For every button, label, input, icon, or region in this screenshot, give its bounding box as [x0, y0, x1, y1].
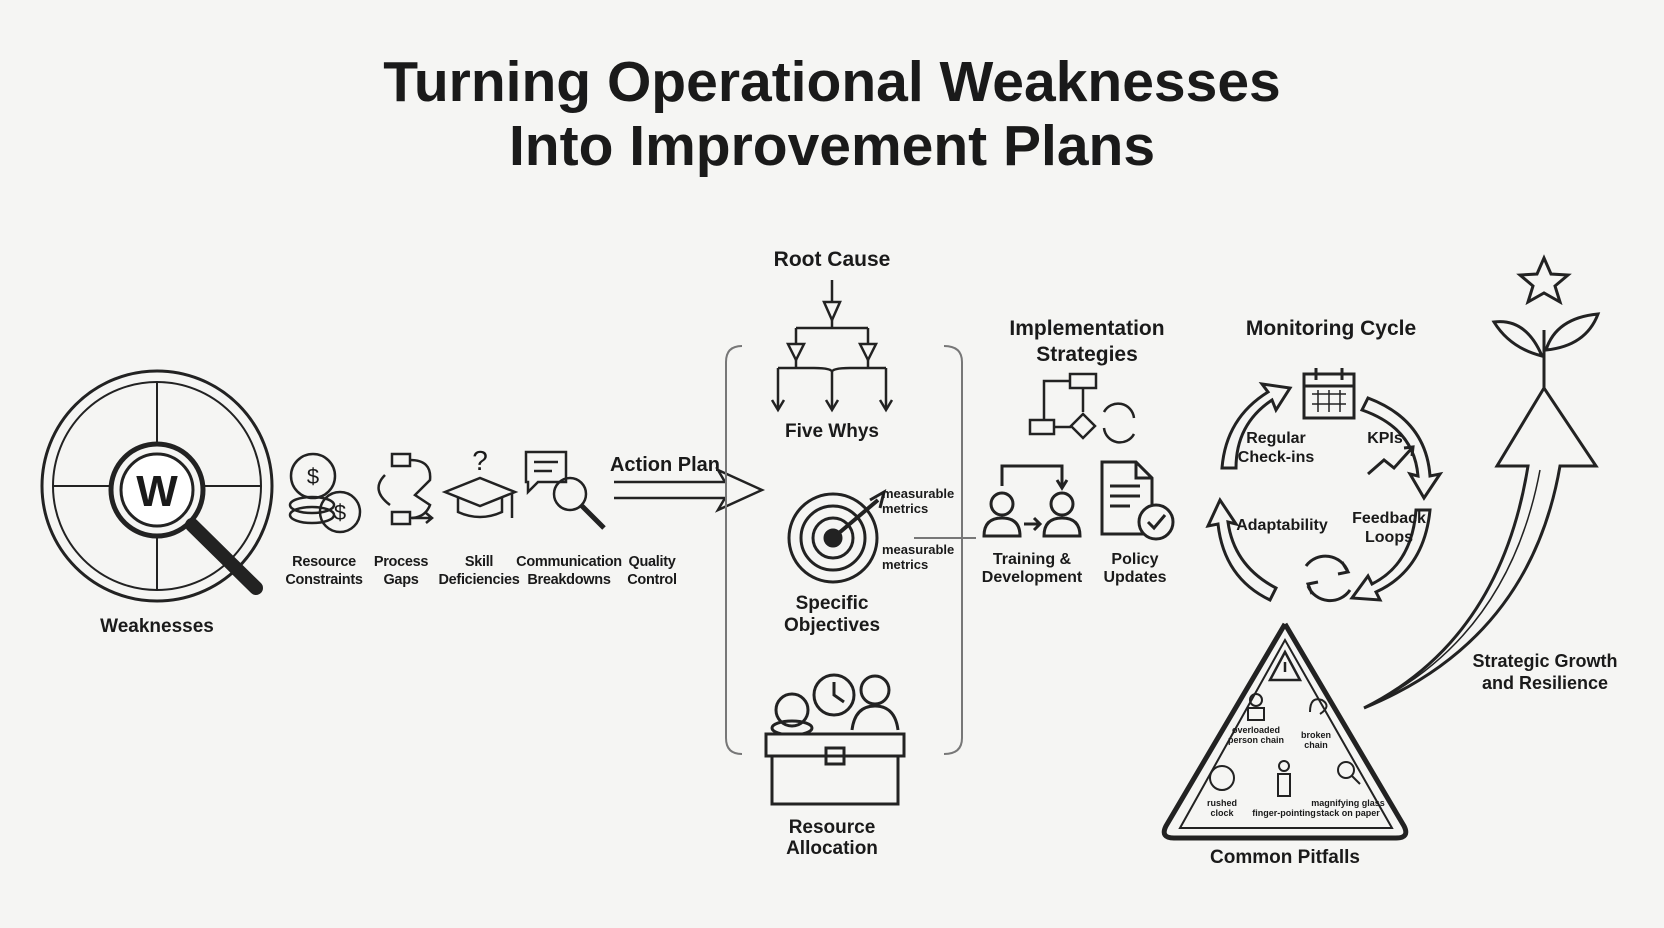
- arrow: action plan: Action Plan: [610, 454, 720, 476]
- icons row: weakness types: [290, 445, 604, 532]
- label: policy updates: Policy: [1111, 551, 1159, 568]
- icon: grad cap: [445, 445, 515, 518]
- label: resource allocation: Resource: [789, 817, 875, 838]
- label: training & development: Development: [982, 569, 1083, 586]
- label: specific objectives: Specific: [796, 593, 869, 614]
- labels: monitoring cycle: Adaptability: [1236, 517, 1328, 534]
- panel: common pitfalls triangle: chain: [1304, 740, 1328, 750]
- label: resource allocation: [786, 817, 878, 859]
- icon: process gaps: [379, 454, 432, 524]
- labels: weakness types: Quality: [628, 554, 676, 570]
- labels: monitoring cycle: Check-ins: [1238, 449, 1314, 466]
- icon: target: [789, 492, 884, 582]
- panel: common pitfalls triangle: clock: [1210, 808, 1235, 818]
- icon: five whys tree: [772, 280, 892, 410]
- label: specific objectives: [784, 593, 880, 636]
- icon: weaknesses wheel with magnifier: W: [136, 467, 178, 516]
- icon: coins: $: [334, 500, 346, 525]
- icon: plant with star: [1494, 258, 1598, 388]
- icon: weaknesses wheel with magnifier: [42, 371, 272, 601]
- icon: coins: $: [307, 464, 319, 489]
- panel: weaknesses: [42, 371, 272, 601]
- icon: warning: [1270, 652, 1300, 680]
- labels: weakness types: Breakdowns: [527, 572, 611, 588]
- label: common pitfalls: Common Pitfalls: [1210, 847, 1360, 868]
- heading: monitoring cycle: Monitoring Cycle: [1246, 317, 1416, 340]
- labels: measurable metrics: metrics: [882, 557, 928, 572]
- panel: common pitfalls triangle: stack on paper: [1316, 808, 1380, 818]
- arrow: strategic growth: [1364, 388, 1596, 708]
- label: strategic growth: Strategic Growth: [1472, 651, 1618, 671]
- panel: common pitfalls triangle: broken: [1301, 730, 1331, 740]
- labels: weakness types: Gaps: [383, 572, 419, 588]
- labels: weakness types: Communication: [516, 554, 622, 570]
- icon: resource allocation toolbox: [766, 675, 904, 804]
- labels: weakness types: Control: [627, 572, 677, 588]
- panel: common pitfalls triangle: overloaded: [1232, 725, 1280, 735]
- icon: communication: [526, 452, 604, 528]
- chart: monitoring cycle arrows: [1208, 368, 1440, 601]
- icon: training & development: [984, 466, 1080, 536]
- labels: weakness types: [285, 554, 677, 588]
- label: policy updates: Updates: [1103, 569, 1167, 586]
- label: training & development: [982, 551, 1083, 586]
- icon: flowchart: [1030, 374, 1134, 442]
- labels: weakness types: Process: [374, 554, 428, 570]
- labels: weakness types: Skill: [465, 554, 493, 570]
- panel: common pitfalls triangle: finger-pointing: [1252, 808, 1316, 818]
- labels: measurable metrics: metrics: [882, 501, 928, 516]
- panel: common pitfalls triangle: magnifying glass: [1311, 798, 1385, 808]
- labels: weakness types: Deficiencies: [438, 572, 520, 588]
- label: five whys: Five Whys: [785, 421, 879, 442]
- title: [383, 50, 1281, 178]
- labels: monitoring cycle: [1236, 430, 1426, 546]
- title: Turning Operational Weaknesses: [383, 50, 1281, 114]
- label: training & development: Training &: [993, 551, 1072, 568]
- panel: action plan bracket: [726, 346, 976, 754]
- icon: grad cap: ?: [472, 445, 488, 476]
- heading: implementation strategies: Implementation: [1009, 317, 1165, 340]
- icon: coins: [290, 454, 360, 532]
- title: Into Improvement Plans: [509, 114, 1155, 178]
- label: specific objectives: Objectives: [784, 615, 880, 636]
- label: resource allocation: Allocation: [786, 838, 878, 859]
- label: weaknesses: Weaknesses: [100, 616, 214, 637]
- labels: monitoring cycle: Feedback: [1352, 510, 1426, 527]
- icon: policy document: [1102, 462, 1173, 539]
- labels: weakness types: Constraints: [285, 572, 363, 588]
- labels: measurable metrics: [882, 486, 954, 572]
- panel: common pitfalls triangle: rushed: [1207, 798, 1237, 808]
- heading: root cause: Root Cause: [774, 248, 890, 271]
- labels: monitoring cycle: Regular: [1246, 430, 1306, 447]
- labels: weakness types: Resource: [292, 554, 356, 570]
- labels: monitoring cycle: KPIs: [1367, 430, 1403, 447]
- heading: implementation strategies: [1009, 317, 1165, 366]
- icons: pitfalls: [1210, 694, 1360, 796]
- arrow: action plan: [610, 454, 762, 510]
- labels: measurable metrics: measurable: [882, 486, 954, 501]
- heading: implementation strategies: Strategies: [1036, 343, 1138, 366]
- labels: measurable metrics: measurable: [882, 542, 954, 557]
- label: policy updates: [1103, 551, 1167, 586]
- labels: monitoring cycle: Loops: [1365, 529, 1413, 546]
- panel: common pitfalls triangle: person chain: [1228, 735, 1284, 745]
- panel: common pitfalls triangle: [1164, 624, 1406, 838]
- label: strategic growth: [1472, 651, 1618, 693]
- label: strategic growth: and Resilience: [1482, 673, 1608, 693]
